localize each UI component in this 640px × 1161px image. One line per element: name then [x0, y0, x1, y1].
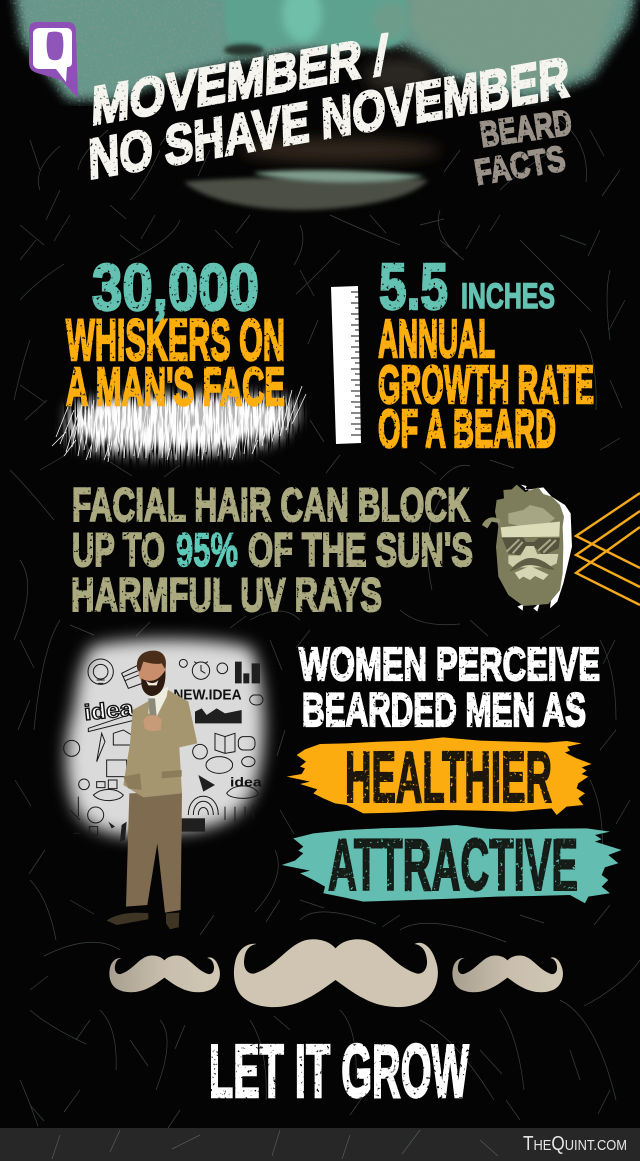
- doodle word: new.idea: NEW.IDEA: [173, 687, 242, 703]
- figure: bearded man: [107, 651, 197, 929]
- title: Movember / No Shave November: MOVEMBER /: [91, 24, 388, 137]
- badge: healthier on orange brush: [287, 737, 592, 818]
- doodles: sketched icons: [64, 659, 263, 835]
- photo: face with skin and lips: [12, 0, 640, 210]
- number: 30,000: 30,000: [92, 250, 259, 324]
- doodle word: idea small: idea: [230, 776, 263, 790]
- text: facial hair UV fact: OF THE SUN'S: [248, 523, 473, 576]
- icons: three moustaches: [109, 939, 563, 1007]
- doodle word: idea: idea: [83, 695, 135, 725]
- logo: The Quint Q: [29, 22, 78, 98]
- footer bar: [0, 1128, 640, 1161]
- icon: bearded head with sunglasses: [482, 485, 572, 612]
- subtitle: Beard Facts: [472, 102, 574, 193]
- panel: idea doodle spotlight: [64, 639, 264, 842]
- text: whiskers on a man's face: A MAN'S FACE: [66, 357, 285, 417]
- stat: 30,000 whiskers: [52, 250, 306, 462]
- text: whiskers on a man's face: [66, 308, 285, 417]
- text: facial hair UV fact: [71, 478, 473, 621]
- number: 5.5: 5.5: [379, 250, 448, 323]
- icon: left moustache: [109, 956, 220, 992]
- text: annual growth rate of a beard: ANNUAL: [378, 309, 495, 369]
- text: annual growth rate of a beard: [378, 309, 594, 459]
- doodles: dark filled details: [108, 662, 260, 842]
- text: facial hair UV fact: HARMFUL UV RAYS: [71, 568, 382, 621]
- icon: centre moustache: [234, 939, 438, 1007]
- unit: inches: INCHES: [461, 277, 555, 316]
- text: women perceive bearded men as: [299, 638, 600, 736]
- subtitle: Beard Facts: BEARD: [477, 102, 574, 155]
- icon: white whisker fur: [52, 386, 306, 462]
- illustration: man in suit before idea doodles: [64, 639, 264, 929]
- text: facial hair UV fact: UP TO: [72, 523, 165, 576]
- icon: ruler: [331, 286, 361, 444]
- decoration: orange chevrons: [576, 493, 640, 605]
- text: facial hair UV fact: 95%: [176, 523, 238, 576]
- footer credit: thequint.com: THEQUINT.COM: [523, 1133, 627, 1155]
- text: whiskers on a man's face: WHISKERS ON: [66, 308, 285, 373]
- subtitle: Beard Facts: FACTS: [472, 137, 568, 193]
- icon: right moustache: [452, 956, 563, 992]
- stat: 5.5 inches annual growth: [378, 250, 594, 459]
